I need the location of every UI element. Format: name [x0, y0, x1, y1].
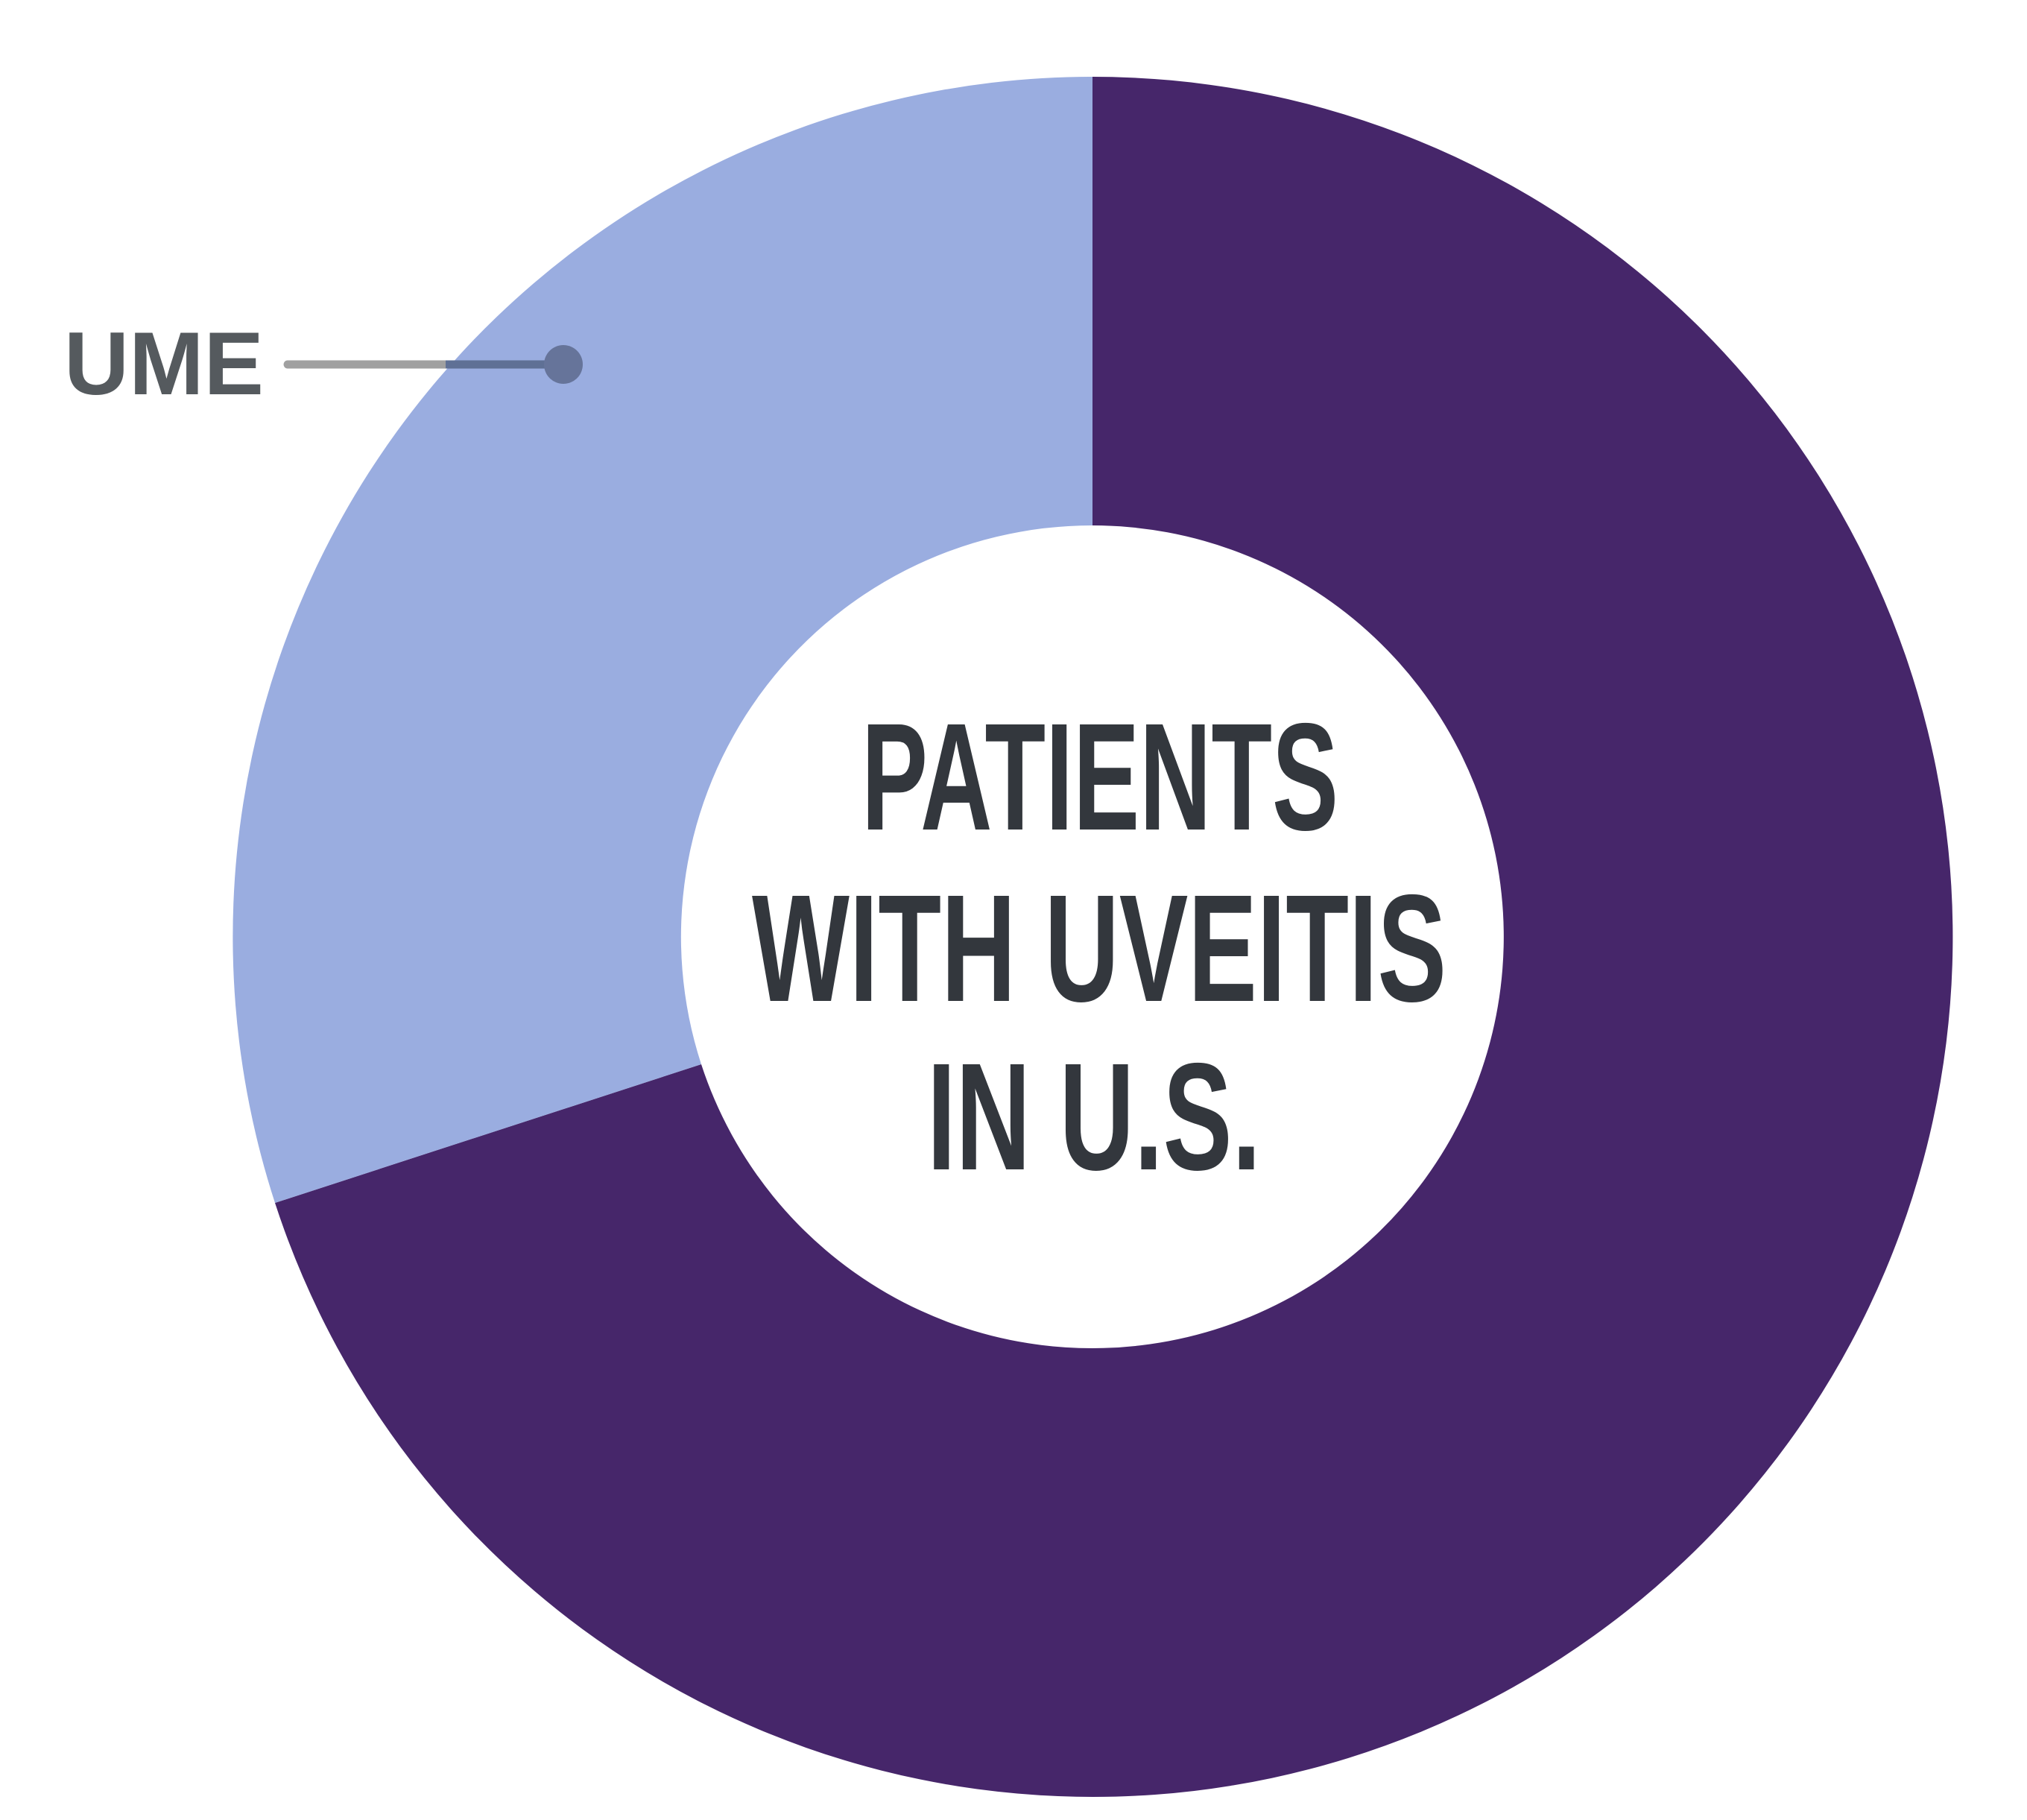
center label — [752, 692, 1446, 1202]
slice: UME (light) — [233, 77, 1092, 1203]
callout: UME: UME — [64, 314, 264, 414]
center label: WITH UVEITIS — [752, 863, 1446, 1034]
center label: IN U.S. — [927, 1031, 1261, 1202]
slice: uveitis (dark) — [275, 77, 1952, 1797]
center label: PATIENTS — [861, 692, 1338, 862]
callout: UME — [64, 314, 583, 414]
